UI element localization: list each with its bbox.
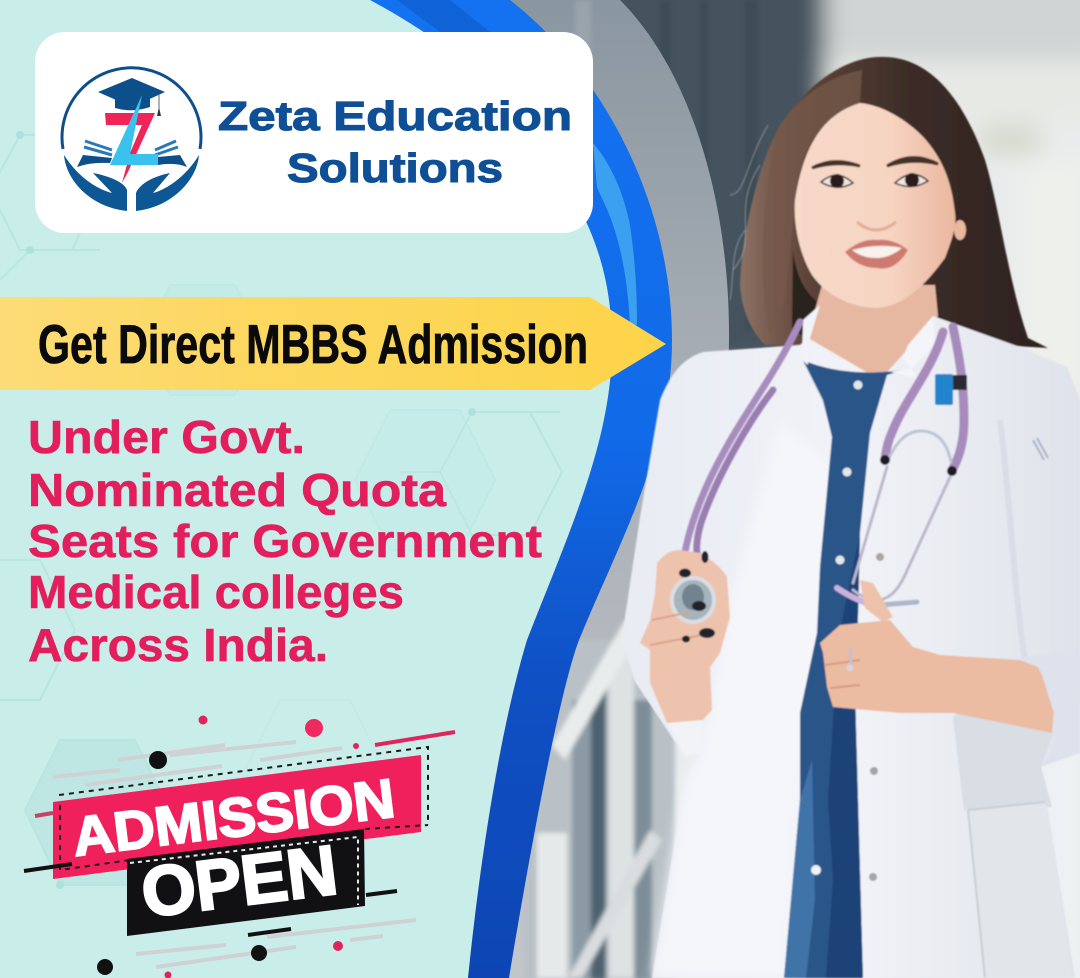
face bbox=[795, 103, 955, 308]
subheading text: Nominated Quota bbox=[28, 464, 446, 516]
hexagon background pattern bbox=[0, 135, 562, 885]
ADMISSION label: ADMISSION bbox=[69, 767, 398, 868]
left teal panel bbox=[0, 0, 612, 978]
open book bbox=[77, 155, 112, 167]
logo card bbox=[35, 32, 593, 233]
subheading text: Seats for Government bbox=[28, 515, 542, 567]
hair bbox=[730, 57, 1048, 348]
stethoscope bbox=[684, 322, 964, 607]
woman doctor photo bbox=[622, 57, 1080, 978]
navy blouse bbox=[784, 360, 908, 978]
pink banner bbox=[53, 755, 421, 879]
dots bbox=[97, 716, 359, 978]
coat grey right panel bbox=[953, 660, 1053, 810]
black banner bbox=[127, 829, 365, 936]
OPEN label: OPEN bbox=[137, 831, 341, 932]
badge clip bbox=[935, 374, 967, 405]
ear tubes bbox=[889, 431, 951, 462]
ring bbox=[62, 68, 201, 149]
logo emblem bbox=[62, 68, 201, 211]
dotted frame bbox=[59, 747, 428, 870]
decorative streaks bbox=[53, 742, 416, 967]
admission open badge bbox=[24, 716, 455, 978]
accent strokes bbox=[24, 732, 455, 935]
blurred railing bbox=[525, 620, 675, 978]
light blue stripe in band bbox=[593, 143, 637, 325]
blue curved band bbox=[370, 0, 672, 978]
graduation cap bbox=[98, 78, 165, 107]
gray crescent with railing bbox=[500, 0, 729, 978]
subheading text: Across India. bbox=[28, 619, 328, 671]
subheading text bbox=[28, 411, 542, 671]
left hand holding chestpiece bbox=[640, 550, 730, 723]
coat front lapel edge bbox=[803, 360, 835, 535]
right hand and forearm bbox=[820, 580, 1055, 733]
neck bbox=[808, 285, 938, 378]
mouth bbox=[845, 240, 908, 269]
darker stripe in band bbox=[397, 0, 490, 32]
letter Z blue bbox=[110, 95, 158, 165]
coat sleeve seam and folds bbox=[1000, 420, 1025, 660]
headline banner bbox=[0, 297, 666, 390]
cradling hands bbox=[64, 155, 127, 211]
eyes bbox=[821, 175, 853, 187]
photo background bbox=[480, 0, 1080, 978]
coat light centre panel bbox=[652, 420, 835, 978]
letter Z red bbox=[105, 113, 155, 183]
loose hair strands bbox=[730, 125, 768, 300]
headline banner: Get Direct MBBS Admission bbox=[38, 313, 588, 375]
left cuff bbox=[655, 700, 703, 757]
coat buttons bbox=[876, 553, 884, 561]
subheading text: Medical colleges bbox=[28, 566, 404, 618]
logo card: Solutions bbox=[287, 145, 503, 191]
white coat bbox=[622, 316, 1080, 978]
company name: Zeta Education bbox=[218, 93, 572, 139]
eyebrows bbox=[812, 157, 938, 168]
nose bbox=[857, 222, 896, 230]
subheading text: Under Govt. bbox=[28, 411, 305, 463]
network nodes bbox=[16, 131, 534, 889]
collars bbox=[802, 305, 820, 365]
white dotted line on black banner bbox=[130, 837, 358, 905]
right cuff bbox=[1020, 650, 1080, 767]
coat pocket bbox=[968, 802, 1072, 978]
